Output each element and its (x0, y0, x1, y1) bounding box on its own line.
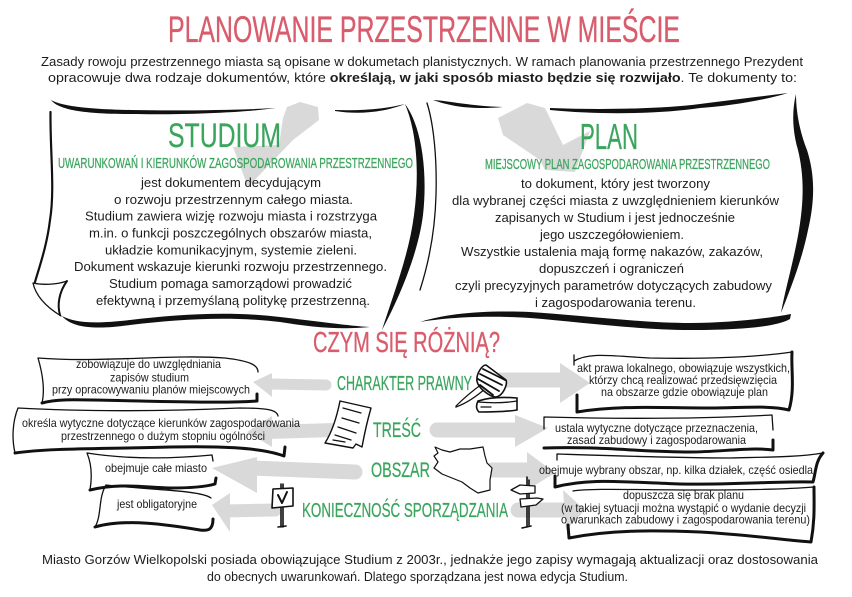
callout: plan charakter prawny: na obszarze gdzie obowiązuje plan (601, 385, 768, 399)
callout: studium treść: przestrzennego o dużym stopniu ogólności (61, 429, 265, 443)
icon: checkbox sign (272, 484, 293, 527)
icon: gavel (456, 365, 517, 412)
text block: studium: Dokument wskazuje kierunki rozwoju przestrzennego. (74, 259, 387, 274)
heading: plan: PLAN (580, 116, 638, 157)
callout: studium obszar: obejmuje całe miasto (105, 461, 207, 475)
callout: studium treść: określa wytyczne dotyczące kierunków zagospodarowania (22, 416, 300, 430)
panel: plan (420, 93, 813, 330)
callout: studium charakter prawny: zobowiązuje do uwzględniania (76, 357, 221, 371)
callout: plan charakter prawny: akt prawa lokalnego, obowiązuje wszystkich, (577, 361, 790, 375)
label: obszar: OBSZAR (371, 459, 430, 482)
arrow: obszar right (492, 452, 555, 490)
callout: studium konieczność (95, 485, 213, 530)
text block: plan: jego uszczegółowieniem. (539, 227, 684, 242)
arrow: to plan (498, 103, 590, 172)
label: treść: TREŚĆ (373, 418, 421, 442)
text block: studium: Studium pomaga samorządowi prowadzić (109, 276, 352, 291)
text block: studium: m.in. o funkcji poszczególnych obszarów miasta, (89, 226, 372, 240)
text block: studium: efektywną i przemyślaną politykę przestrzenną. (96, 293, 370, 308)
callout: studium treść (13, 408, 300, 456)
text block: plan: to dokument, który jest tworzony (521, 176, 710, 191)
text block: studium: Studium zawiera wizję rozwoju miasta i rozstrzyga (85, 208, 378, 224)
callout: studium charakter prawny: przy opracowywaniu planów miejscowych (52, 382, 250, 396)
footer text: do obecnych uwarunkowań. Dlatego sporządzana jest nowa edycja Studium. (207, 569, 628, 584)
panel: studium (33, 100, 425, 330)
heading: studium: STUDIUM (168, 117, 281, 155)
arrow: treść right (437, 415, 548, 447)
arrow: charakter prawny right (500, 363, 590, 403)
callout: plan konieczność: (w takiej sytuacji można wystąpić o wydanie decyzji (561, 501, 806, 515)
intro text (41, 54, 803, 85)
icon: signpost (511, 477, 543, 528)
text block: plan: i zagospodarowania terenu. (535, 295, 696, 310)
callout: studium charakter prawny (38, 357, 258, 403)
label: charakter prawny: CHARAKTER PRAWNY (337, 373, 472, 395)
arrow: obszar left (212, 457, 355, 493)
subheading: studium: UWARUNKOWAŃ I KIERUNKÓW ZAGOSPODAROWANIA PRZESTRZENNEGO (58, 155, 413, 172)
callout: plan treść: zasad zabudowy i zagospodarowania (567, 433, 746, 447)
callout: plan konieczność: dopuszcza się brak planu (623, 488, 744, 502)
intro text: Zasady rowoju przestrzennego miasta są opisane w dokumetach planistycznych. W ramach planowania przestrzennego Prezydent (41, 54, 803, 69)
arrow: konieczność left (212, 493, 275, 532)
text block: plan: Wszystkie ustalenia mają formę nakazów, zakazów, (461, 244, 763, 259)
arrow: charakter prawny left (253, 373, 326, 397)
callout: studium konieczność: jest obligatoryjne (116, 497, 197, 511)
callout: studium obszar (87, 453, 216, 490)
callout: studium charakter prawny: zapisów studium (110, 370, 189, 384)
label: konieczność sporządzania: KONIECZNOŚĆ SPORZĄDZANIA (302, 498, 508, 522)
callout: plan konieczność: o warunkach zabudowy i zagospodarowania terenu) (561, 512, 810, 526)
text block: studium: jest dokumentem decydującym (140, 175, 321, 190)
text block: plan: zapisanych w Studium i jest jednocześnie (495, 210, 735, 225)
arrow: konieczność right (518, 490, 585, 530)
callout: plan konieczność (561, 487, 814, 542)
text block: plan (452, 176, 780, 310)
callout: plan treść: ustala wytyczne dotyczące przeznaczenia, (555, 421, 758, 435)
icon: document (325, 401, 371, 448)
panel outline: studium (33, 100, 425, 330)
icon: city map (434, 447, 492, 493)
footer text: Miasto Gorzów Wielkopolski posiada obowiązujące Studium z 2003r., jednakże jego zapisy wymagają aktualizacji oraz dostosowania (42, 552, 819, 567)
arrow: to studium (233, 102, 319, 187)
text block: studium (74, 175, 387, 308)
arrow: treść left (247, 416, 335, 447)
panel outline: plan (420, 93, 813, 330)
text block: studium: układzie komunikacyjnym, systemie zieleni. (105, 242, 357, 258)
callout: plan obszar (539, 453, 823, 487)
text block: plan: czyli precyzyjnych parametrów dotyczących zabudowy (455, 278, 772, 293)
callout: plan obszar: obejmuje wybrany obszar, np. kilka działek, część osiedla (539, 463, 813, 477)
callout: plan charakter prawny (574, 352, 792, 412)
text block: studium: o rozwoju przestrzennym całego miasta. (114, 192, 353, 207)
callout: plan treść (544, 415, 773, 452)
section heading: CZYM SIĘ RÓŻNIĄ? (313, 326, 500, 359)
footer text (42, 552, 819, 584)
callout: plan charakter prawny: którzy chcą realizować przedsięwzięcia (589, 373, 777, 387)
text block: plan: dopuszczeń i ograniczeń (539, 261, 684, 276)
text block: plan: dla wybranej części miasta z uwzględnieniem kierunków (452, 193, 780, 208)
intro text: opracowuje dwa rodzaje dokumentów, które określają, w jaki sposób miasto będzie się rozwijało . Te dokumenty to: (48, 70, 797, 85)
